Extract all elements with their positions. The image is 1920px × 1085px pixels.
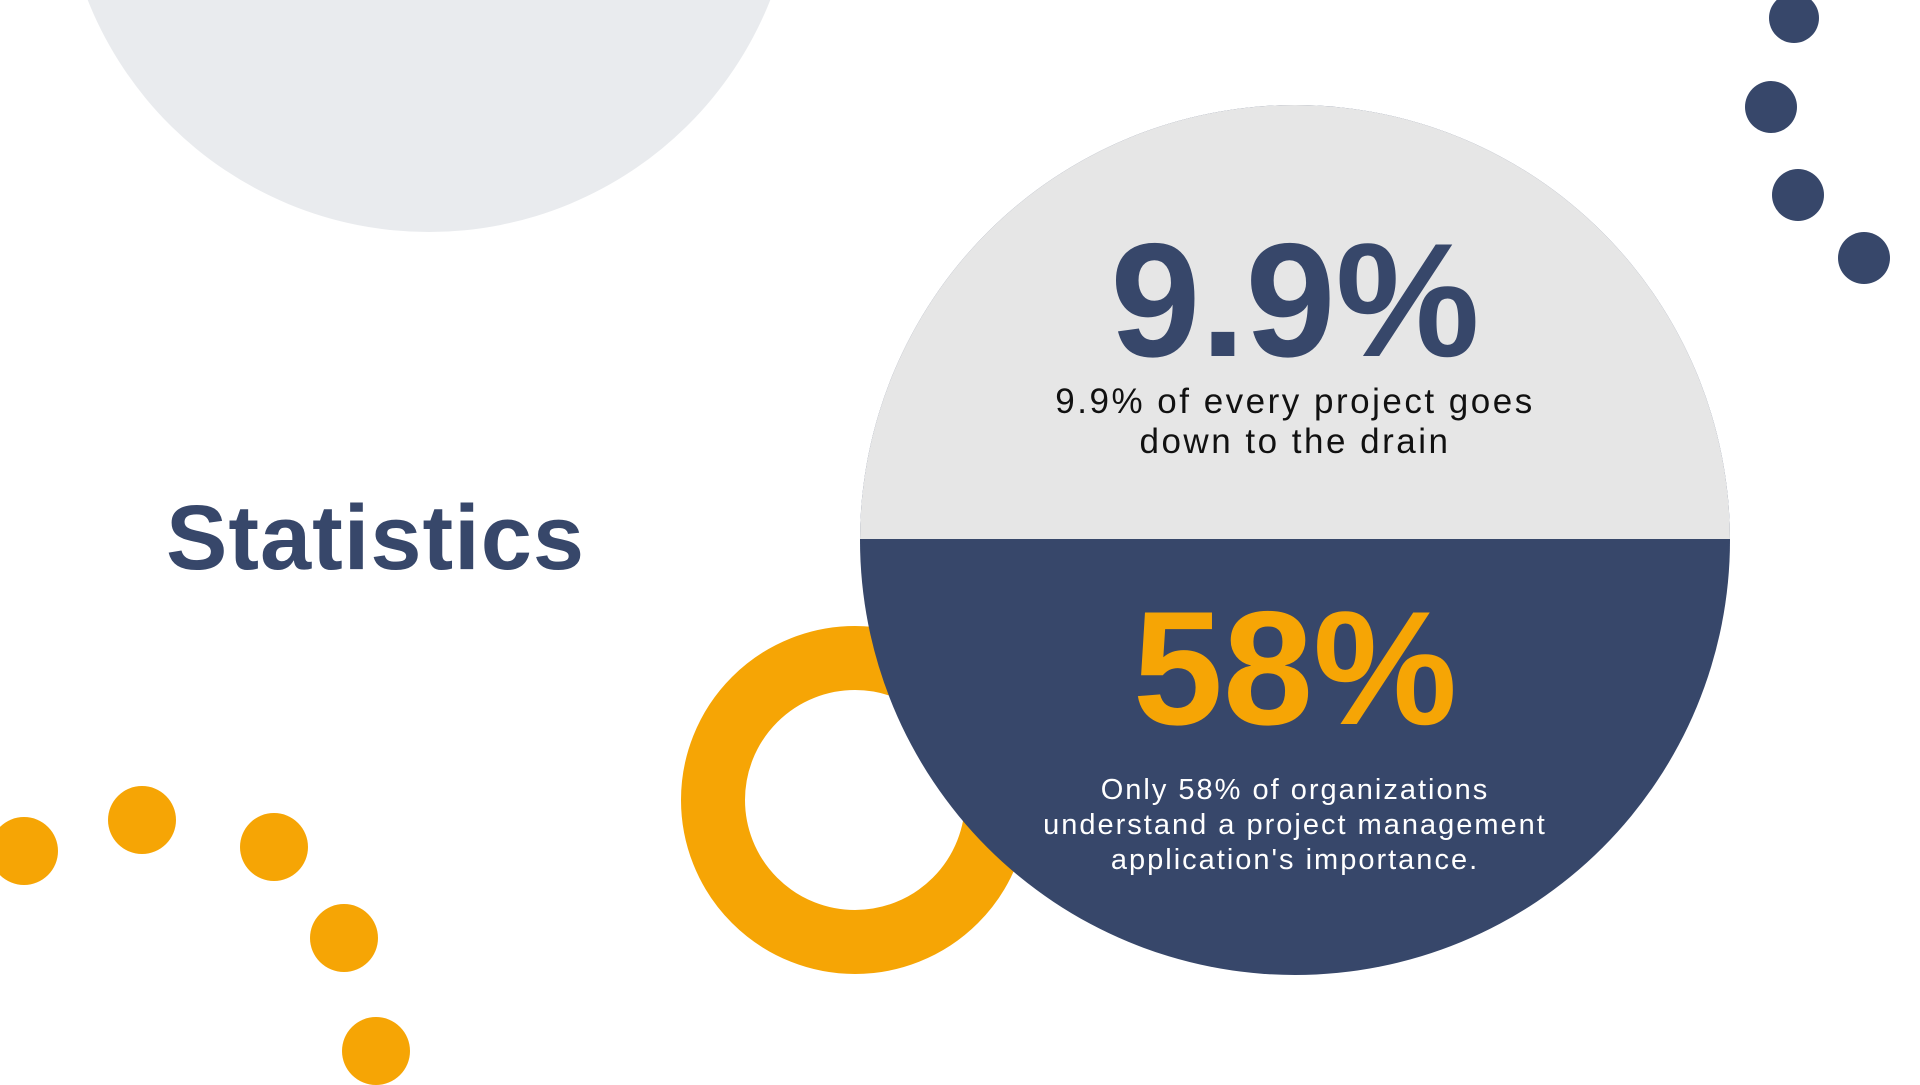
title: Statistics	[166, 487, 585, 589]
stat 9.9% description: 9.9% of every project goes	[1055, 382, 1535, 421]
stat 58% description	[1043, 774, 1547, 876]
decorative gray circle	[62, 0, 796, 232]
orange dots	[0, 786, 410, 1085]
navy dots	[1745, 0, 1890, 284]
stat 58% description: Only 58% of organizations	[1101, 774, 1489, 806]
stat 9.9% description: down to the drain	[1139, 422, 1450, 461]
stat 9.9%: 9.9%	[1110, 210, 1480, 391]
stat 58% description: understand a project management	[1043, 809, 1547, 841]
stat 58% description: application's importance.	[1111, 844, 1479, 876]
stat 9.9% description	[1055, 382, 1535, 461]
orange ring	[681, 626, 1029, 974]
main split circle	[860, 105, 1730, 975]
stat 58%: 58%	[1133, 578, 1457, 759]
